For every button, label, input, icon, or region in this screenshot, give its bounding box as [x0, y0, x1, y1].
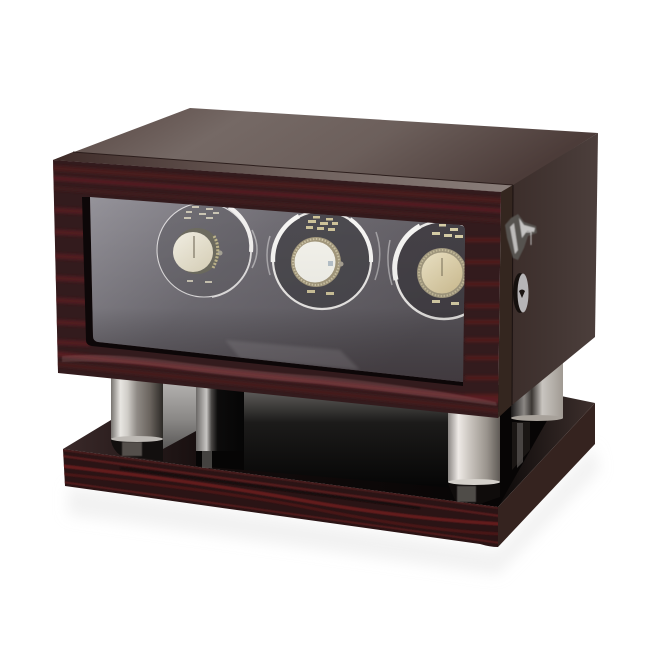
front frame [52, 160, 504, 418]
keyhole [513, 273, 528, 313]
lid seam [73, 152, 513, 185]
winder 3 [387, 222, 465, 320]
door seam [512, 185, 513, 405]
cabinet [52, 108, 598, 418]
leg: back right with reflection [511, 360, 563, 470]
winder 2 [267, 211, 380, 309]
under-cabinet void [163, 370, 561, 507]
base front veneer [62, 449, 500, 547]
lid bevel [53, 152, 513, 192]
product photo: watch winder cabinet [53, 108, 598, 571]
leg: back left with reflection [196, 385, 244, 470]
watch 1 bracelet [184, 206, 219, 283]
winder 1 [157, 203, 257, 297]
glass inner black edge [82, 197, 463, 386]
glass window [82, 197, 493, 386]
watch 3 bracelet [432, 224, 463, 305]
clasp [505, 214, 537, 260]
watch 3 dial [417, 248, 467, 298]
leg: front left with reflection [111, 375, 163, 461]
leg: front right with reflection [448, 412, 500, 504]
glass shading [92, 260, 464, 382]
cabinet right side [512, 133, 598, 405]
winder tray reflection [225, 340, 360, 370]
watch 1 dial [174, 228, 220, 274]
floor shadow [68, 446, 600, 575]
base top surface [63, 396, 595, 507]
frame bottom glare [62, 355, 497, 406]
door edge band [498, 185, 513, 418]
cabinet top face [53, 108, 598, 192]
base right side [498, 403, 595, 547]
watch 2 bracelet [306, 216, 338, 295]
stand base [62, 396, 595, 547]
watch 2 dial [291, 237, 341, 287]
